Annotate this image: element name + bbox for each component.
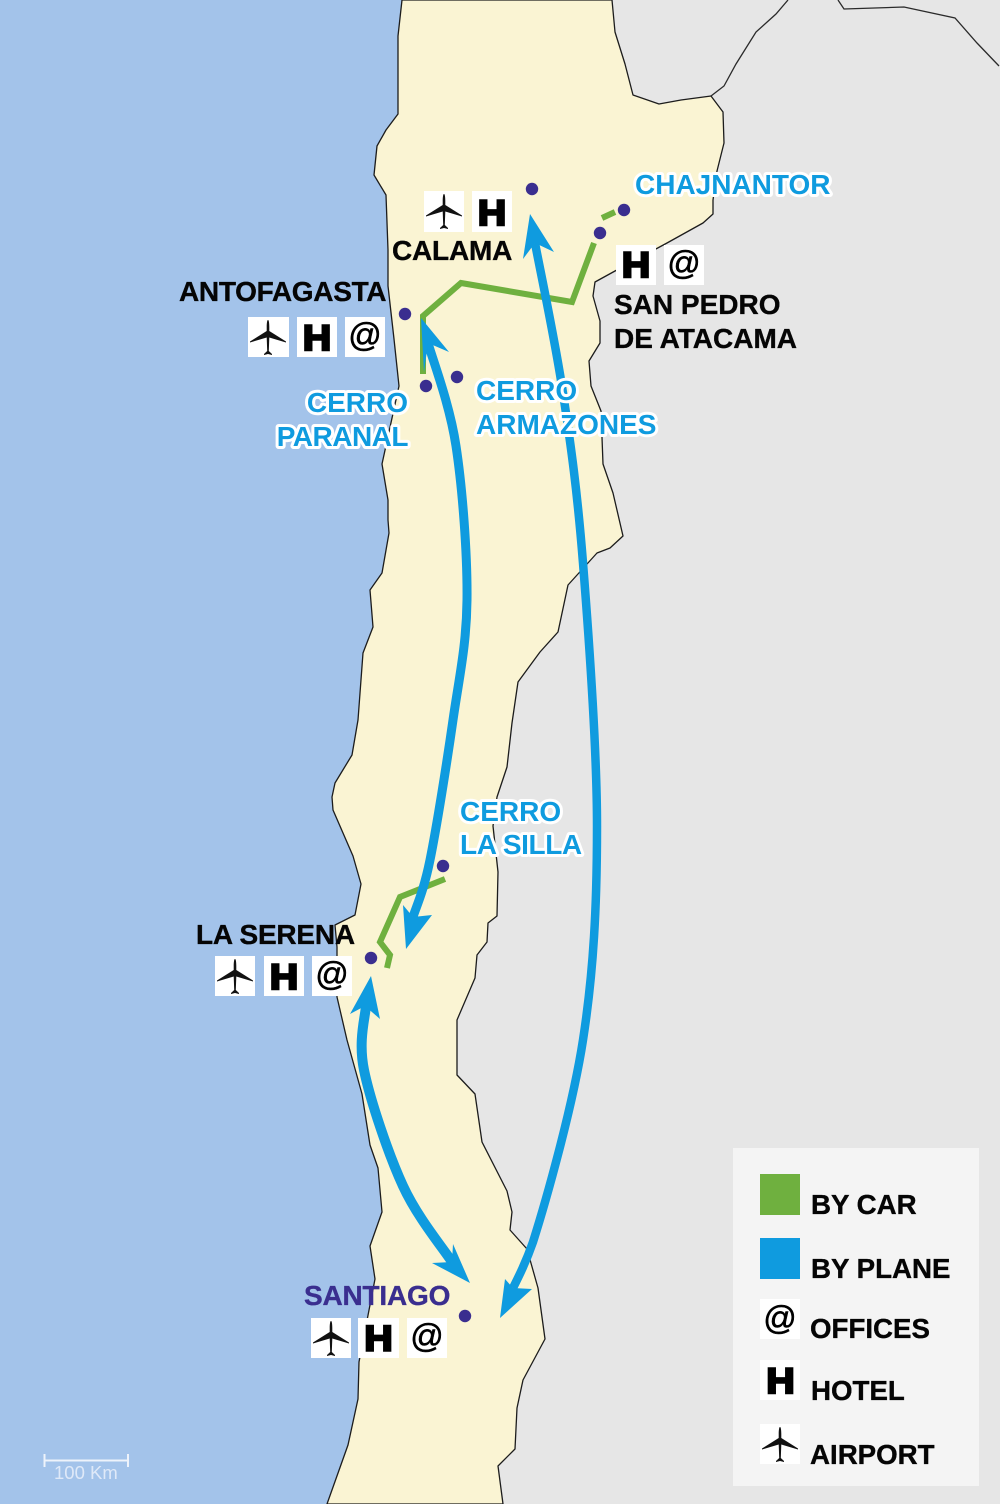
legend panel bbox=[733, 1148, 979, 1486]
label: Cerro La Silla bbox=[460, 796, 582, 860]
neighbouring countries land bbox=[420, 0, 1000, 1504]
legend: by plane bbox=[760, 1238, 950, 1284]
legend: offices bbox=[760, 1299, 930, 1344]
plane route: Santiago to La Serena arrow bbox=[350, 976, 470, 1283]
Santiago icons: @ bbox=[410, 1317, 444, 1354]
Santiago icons bbox=[311, 1317, 447, 1358]
label: Cerro Paranal: PARANAL bbox=[277, 421, 408, 452]
label: Santiago: SANTIAGO bbox=[304, 1280, 450, 1311]
legend: airport bbox=[760, 1424, 935, 1470]
scale bar: 100 Km bbox=[54, 1462, 118, 1483]
legend: by car: BY CAR bbox=[811, 1189, 917, 1220]
San Pedro icons bbox=[616, 244, 704, 285]
label: Cerro Armazones: CERRO bbox=[476, 375, 577, 406]
label: Cerro Armazones bbox=[476, 375, 656, 440]
label: Chajnantor: CHAJNANTOR bbox=[635, 169, 830, 200]
label: Cerro La Silla: LA SILLA bbox=[460, 829, 582, 860]
Calama icons bbox=[424, 191, 512, 233]
label: San Pedro de Atacama: DE ATACAMA bbox=[614, 323, 797, 354]
label: La Serena: LA SERENA bbox=[196, 919, 355, 950]
legend: hotel: H bbox=[766, 1361, 795, 1401]
plane route: Santiago to Calama arrow bbox=[500, 214, 597, 1318]
legend: hotel: HOTEL bbox=[811, 1375, 905, 1406]
legend: hotel bbox=[760, 1360, 905, 1406]
label: Cerro Paranal bbox=[277, 387, 408, 452]
San Pedro icons: H bbox=[622, 245, 650, 285]
La Serena icons: H bbox=[270, 957, 298, 997]
Santiago icons: H bbox=[364, 1318, 393, 1358]
map: Chile land bbox=[327, 0, 724, 1504]
San Pedro icons: @ bbox=[667, 244, 701, 281]
legend: offices: @ bbox=[763, 1299, 797, 1336]
label: Cerro Armazones: ARMAZONES bbox=[476, 409, 656, 440]
La Serena icons: @ bbox=[315, 955, 349, 992]
label: Antofagasta: ANTOFAGASTA bbox=[179, 276, 386, 307]
label: Cerro La Silla: CERRO bbox=[460, 796, 561, 827]
legend: airport: AIRPORT bbox=[810, 1439, 935, 1470]
label: Cerro Paranal: CERRO bbox=[307, 387, 408, 418]
label: Calama: CALAMA bbox=[392, 235, 512, 266]
legend: by plane: BY PLANE bbox=[811, 1253, 950, 1284]
label: San Pedro de Atacama bbox=[614, 289, 797, 354]
La Serena icons bbox=[215, 955, 352, 997]
legend: by car bbox=[760, 1174, 917, 1220]
car routes bbox=[380, 212, 615, 968]
scale bar bbox=[44, 1454, 128, 1483]
Calama icons: H bbox=[478, 193, 506, 233]
Antofagasta icons: @ bbox=[348, 316, 382, 353]
country borders bbox=[711, 0, 999, 96]
Antofagasta icons: H bbox=[303, 318, 331, 358]
location dots bbox=[365, 183, 630, 1322]
label: San Pedro de Atacama: SAN PEDRO bbox=[614, 289, 780, 320]
legend: offices: OFFICES bbox=[810, 1313, 930, 1344]
plane route: La Serena to Antofagasta arrow bbox=[403, 318, 467, 949]
Antofagasta icons bbox=[248, 316, 385, 358]
